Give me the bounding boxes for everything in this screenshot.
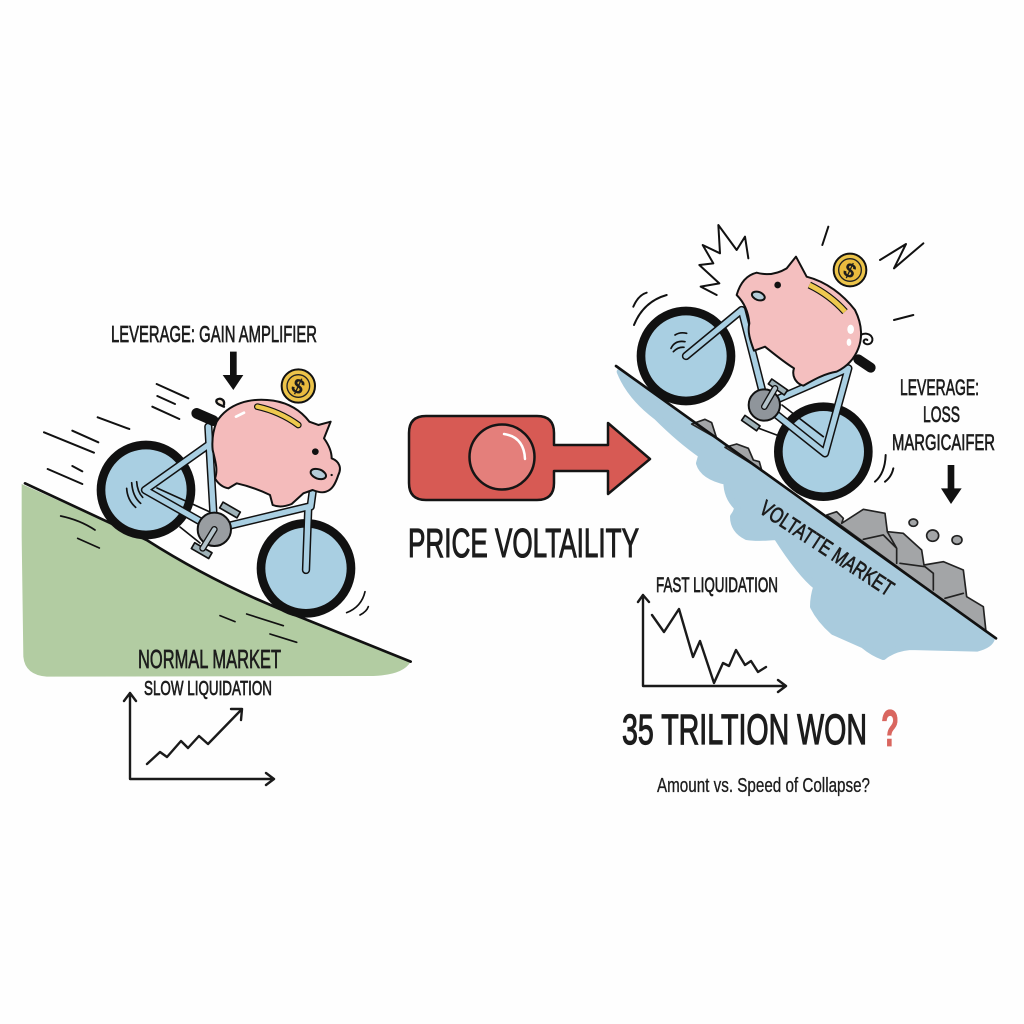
bicycle	[101, 413, 368, 615]
hill	[22, 483, 411, 677]
heading: 35 trillion won	[622, 700, 899, 758]
coin	[282, 369, 315, 403]
heading: leverage gain amplifier: LEVERAGE: GAIN AMPLIFIER	[111, 321, 317, 347]
panel: volatile market	[616, 225, 996, 657]
label: slow liquidation: SLOW LIQUIDATION	[144, 678, 272, 700]
heading: price volatility: PRICE VOLTAILITY	[408, 520, 639, 566]
coin	[834, 254, 866, 286]
slope	[620, 372, 992, 657]
rocks	[692, 419, 986, 632]
text block: leverage loss: LEVERAGE:	[900, 375, 979, 400]
coin: $	[840, 259, 859, 284]
piggy bank	[737, 257, 872, 386]
arrow: downward pointer	[941, 465, 962, 504]
arrow: downward pointer	[223, 352, 243, 390]
label: normal market: NORMAL MARKET	[138, 644, 281, 674]
piggy bank	[212, 399, 340, 506]
slope line	[616, 366, 996, 638]
icon: price volatility red arrow	[409, 416, 650, 500]
label: volatile market: VOLTATTE MARKET	[755, 495, 899, 601]
bicycle	[641, 310, 871, 497]
impact marks	[633, 225, 923, 482]
heading: 35 trillion won: 35 TRILTION WON	[622, 706, 867, 754]
text block: leverage loss: LOSS	[923, 402, 960, 427]
question mark: ?	[881, 700, 899, 758]
text block: leverage loss	[892, 375, 995, 455]
subheading: Amount vs. Speed of Collapse?	[657, 775, 870, 797]
chart: falling line	[638, 595, 786, 692]
speed lines	[44, 384, 188, 484]
panel: normal market	[22, 352, 411, 677]
coin: $	[288, 374, 309, 400]
chart: rising line	[124, 693, 274, 785]
label: fast liquidation: FAST LIQUIDATION	[656, 574, 778, 597]
